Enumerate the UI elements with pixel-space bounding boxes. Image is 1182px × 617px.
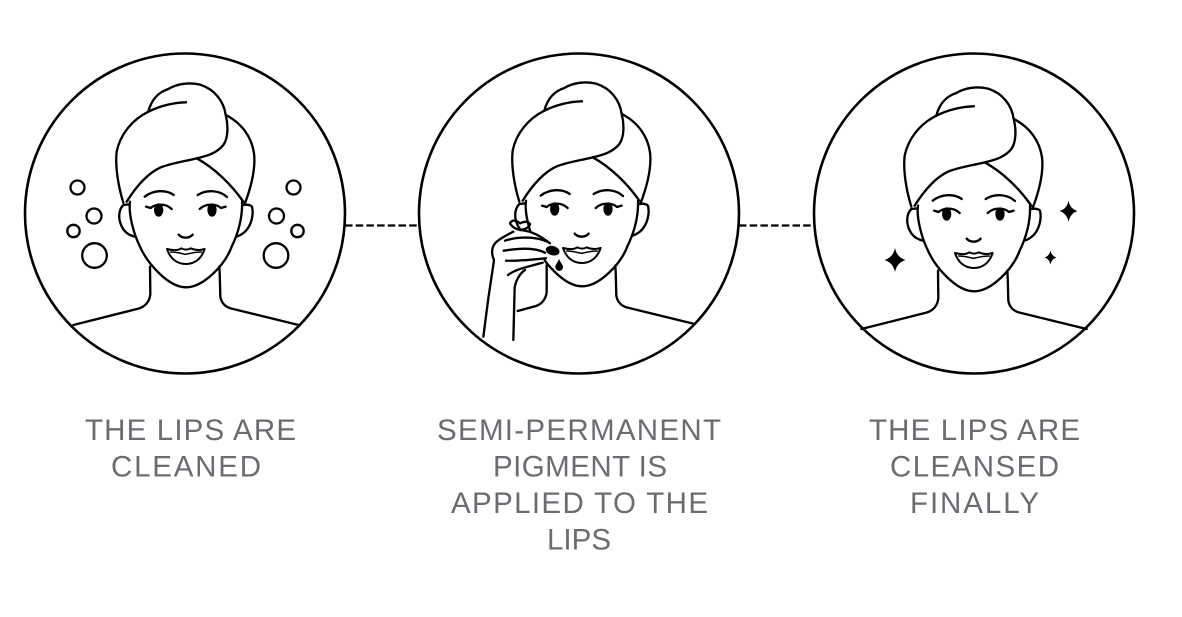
connector: dashed line 1 to 2 (345, 224, 420, 227)
caption: step 2: PIGMENT IS (493, 450, 667, 484)
circle frame 1 (25, 54, 345, 374)
caption: step 3 (869, 414, 1080, 520)
caption: step 2 (437, 414, 721, 556)
caption: step 3: CLEANSED (890, 450, 1059, 484)
caption: step 1 (85, 414, 296, 484)
caption: step 2: SEMI-PERMANENT (437, 414, 721, 447)
connector: dashed line 2 to 3 (739, 224, 814, 227)
icon: cleansing bubbles left (67, 180, 107, 268)
icon: hand with pigment dropper (483, 221, 563, 340)
panel: step 2 pigment applied (419, 54, 739, 374)
caption: step 1: CLEANED (111, 450, 261, 484)
caption: step 3: FINALLY (910, 487, 1039, 520)
caption: step 1: THE LIPS ARE (85, 414, 296, 447)
icon: sparkles (884, 200, 1078, 272)
panel: step 3 lips cleansed finally (814, 54, 1134, 374)
caption: step 2: LIPS (547, 524, 611, 556)
caption: step 3: THE LIPS ARE (869, 414, 1080, 447)
circle frame 2 (419, 54, 739, 374)
icon: woman with towel, step 2 (512, 82, 695, 324)
icon: woman with towel, step 3 (861, 87, 1087, 329)
icon: cleansing bubbles right (264, 180, 304, 268)
icon: woman with towel, step 1 (73, 83, 299, 325)
caption: step 2: APPLIED TO THE (451, 487, 708, 520)
panel: step 1 lips cleaned (25, 54, 345, 374)
circle frame 3 (814, 54, 1134, 374)
